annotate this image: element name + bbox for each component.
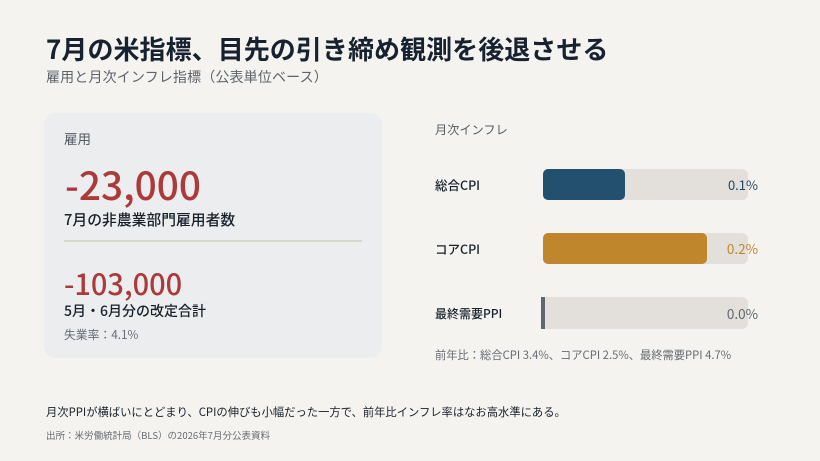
takeaway: 月次PPIが横ばいにとどまり、CPIの伸びも小幅だった一方で、前年比インフレ率はなお高水準にある。 — [46, 404, 566, 420]
bar marker — [541, 297, 545, 329]
source: 出所：米労働統計局（BLS）の2026年7月分公表資料 — [46, 428, 270, 442]
big number: payrolls: -23,000 — [65, 156, 201, 212]
year-over-year note: 前年比：総合CPI 3.4%、コアCPI 2.5%、最終需要PPI 4.7% — [435, 347, 731, 363]
bar track — [543, 169, 748, 200]
label: revisions: 5月・6月分の改定合計 — [64, 301, 206, 321]
row: final demand PPI — [435, 297, 758, 329]
label: 総合CPI — [435, 175, 480, 194]
label: 最終需要PPI — [435, 305, 502, 322]
heading: monthly inflation: 月次インフレ — [435, 120, 508, 138]
label: payrolls: 7月の非農業部門雇用者数 — [64, 209, 235, 230]
bar fill — [543, 169, 625, 200]
row: core CPI — [435, 233, 758, 264]
value: 0.0% — [727, 303, 758, 323]
bar track — [541, 297, 748, 329]
bar fill — [543, 233, 707, 264]
title: 7月の米指標、目先の引き締め観測を後退させる — [46, 30, 608, 67]
panel heading: employment: 雇用 — [64, 128, 91, 148]
value: 0.1% — [728, 175, 758, 194]
row: headline CPI — [435, 169, 758, 200]
number: revisions: -103,000 — [64, 262, 182, 304]
value: 0.2% — [727, 238, 758, 258]
label: コアCPI — [435, 239, 480, 258]
bar track — [543, 233, 748, 264]
panel: employment — [44, 113, 382, 358]
unemployment rate: 失業率：4.1% — [64, 326, 138, 343]
subtitle: 雇用と月次インフレ指標（公表単位ベース） — [46, 67, 328, 87]
